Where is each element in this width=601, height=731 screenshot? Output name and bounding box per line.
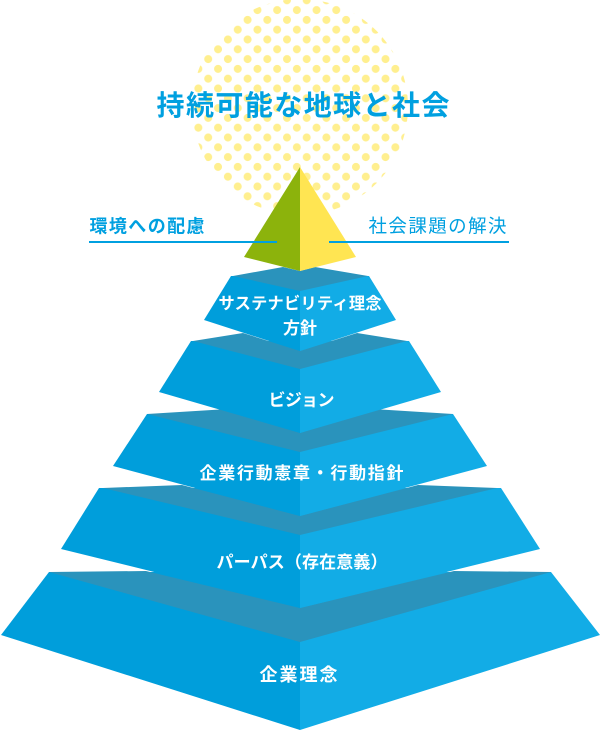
label: code of conduct: 企業行動憲章・行動指針	[200, 463, 404, 483]
top pyramid	[244, 167, 356, 271]
title: 持続可能な地球と社会	[156, 90, 450, 121]
dotted yellow circle	[192, 0, 408, 215]
tier: vision	[159, 333, 441, 433]
tier: corporate philosophy	[1, 571, 600, 730]
label: environmental consideration: 環境への配慮	[90, 216, 204, 236]
tier: purpose	[61, 485, 540, 608]
tier: code of conduct	[113, 409, 487, 516]
label: sustainability policy line 2: 方針	[283, 318, 317, 338]
label: sustainability policy line 1: サステナビリティ理念	[218, 294, 382, 313]
label: corporate philosophy: 企業理念	[260, 665, 338, 685]
label: solving social issues: 社会課題の解決	[368, 216, 506, 236]
tier: sustainability policy	[204, 267, 396, 351]
label: vision: ビジョン	[268, 390, 334, 410]
label: purpose: パーパス（存在意義）	[216, 552, 388, 572]
